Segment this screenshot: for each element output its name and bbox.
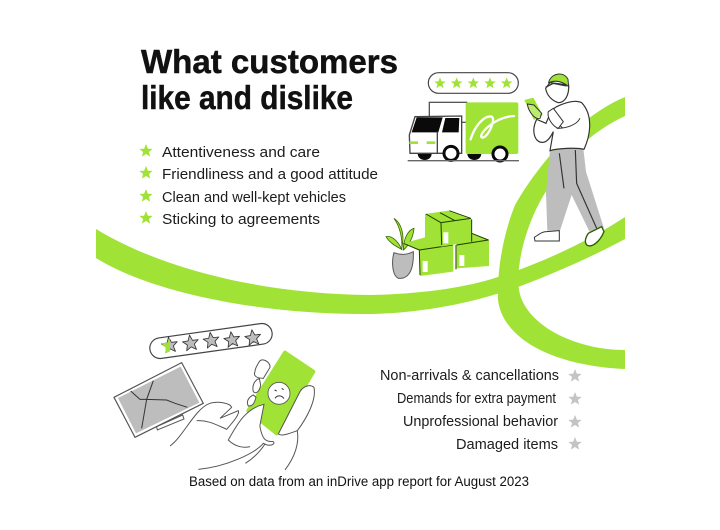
- hands and phone: [170, 353, 314, 470]
- like 1: Attentiveness and care: [162, 145, 320, 161]
- green curved band: arc: [498, 97, 625, 369]
- title: like and dislike: [141, 80, 353, 117]
- title: [141, 44, 398, 117]
- source note: Based on data from an inDrive app report for August 2023: [189, 474, 529, 489]
- cracked tablet: [114, 363, 203, 437]
- person with phone: [524, 74, 604, 246]
- stacked boxes: [403, 211, 489, 276]
- dislike 2: Demands for extra payment: [397, 391, 556, 407]
- green curved band: road: [96, 217, 625, 314]
- like 4: Sticking to agreements: [162, 212, 320, 228]
- title: What customers: [141, 44, 398, 81]
- dislike 4: Damaged items: [456, 437, 558, 453]
- truck: [408, 102, 519, 161]
- dislike 1: Non-arrivals & cancellations: [380, 368, 559, 384]
- list: likes: [139, 144, 378, 228]
- dislike 3: Unprofessional behavior: [403, 414, 558, 430]
- illustration: boxes and plant: [386, 211, 489, 278]
- like 2: Friendliness and a good attitude: [162, 167, 378, 183]
- five-star rating pill: [428, 73, 518, 93]
- illustration: delivery truck and rating: [408, 73, 604, 246]
- plant: [386, 218, 414, 278]
- list: dislikes: [380, 368, 582, 453]
- one-star rating pill: [148, 322, 273, 360]
- like 3: Clean and well-kept vehicles: [162, 190, 346, 206]
- illustration: broken tablet, bad rating, phone: [114, 322, 314, 470]
